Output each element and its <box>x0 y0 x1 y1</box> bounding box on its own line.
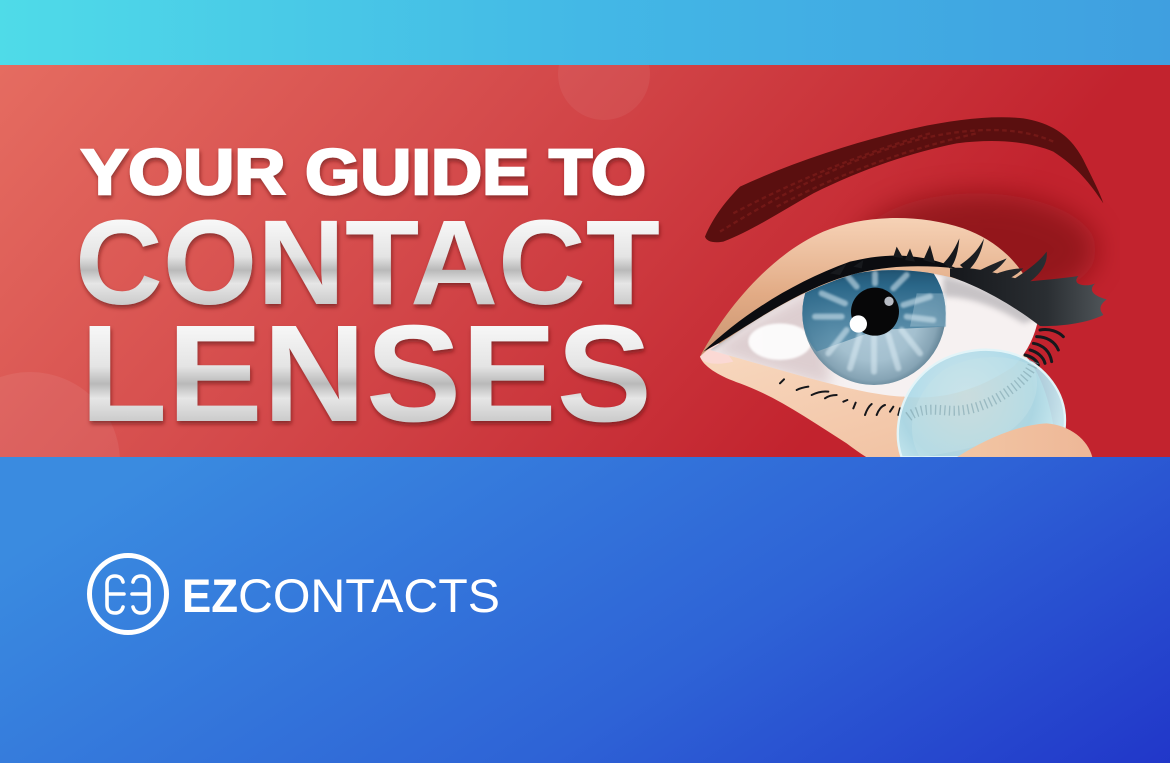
logo mark <box>90 556 166 632</box>
sclera shading and iris <box>703 242 1038 387</box>
bottom blue panel <box>0 457 1170 763</box>
title: your guide to contact lenses <box>75 136 660 451</box>
upper eyelid skin <box>700 218 1037 357</box>
fingertip <box>957 423 1092 457</box>
inner eye corner <box>700 343 733 364</box>
top cyan band <box>0 0 1170 66</box>
shadow around eye <box>857 193 1097 307</box>
upper eyelashes <box>830 238 1107 326</box>
logo: ezcontacts <box>90 556 500 632</box>
sclera <box>710 270 1038 397</box>
logo wordmark: EZ <box>182 569 238 622</box>
illustration: eye with contact lens <box>700 117 1107 457</box>
outer lower lashes <box>1025 330 1063 365</box>
contact lens <box>898 350 1065 457</box>
lower eyelashes <box>780 379 900 415</box>
red banner <box>0 65 1170 457</box>
lower eyelid skin <box>700 347 1057 457</box>
upper lash line <box>703 256 957 352</box>
logo wordmark: CONTACTS <box>238 569 500 622</box>
title: your guide to contact lenses: LENSES <box>80 297 652 451</box>
title: your guide to contact lenses: CONTACT <box>75 194 660 330</box>
title: your guide to contact lenses: YOUR GUIDE TO <box>81 136 646 208</box>
eyebrow <box>705 117 1103 242</box>
